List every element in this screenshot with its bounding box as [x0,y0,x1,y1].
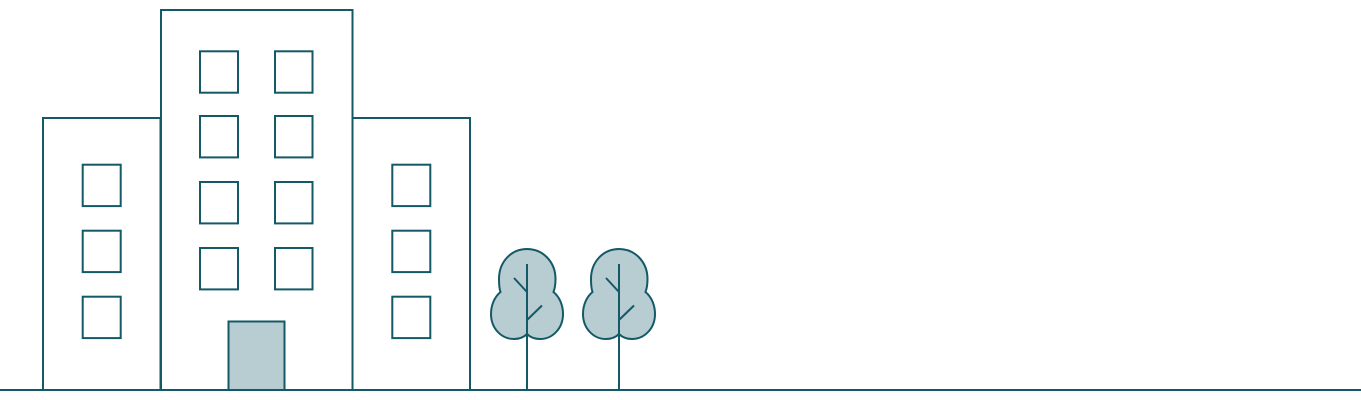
ground line [0,389,1361,391]
right building [352,118,470,390]
tree 1 [491,249,563,390]
left building [43,118,160,390]
central tower [161,10,352,390]
tree 2 [583,249,655,390]
door [228,322,284,390]
